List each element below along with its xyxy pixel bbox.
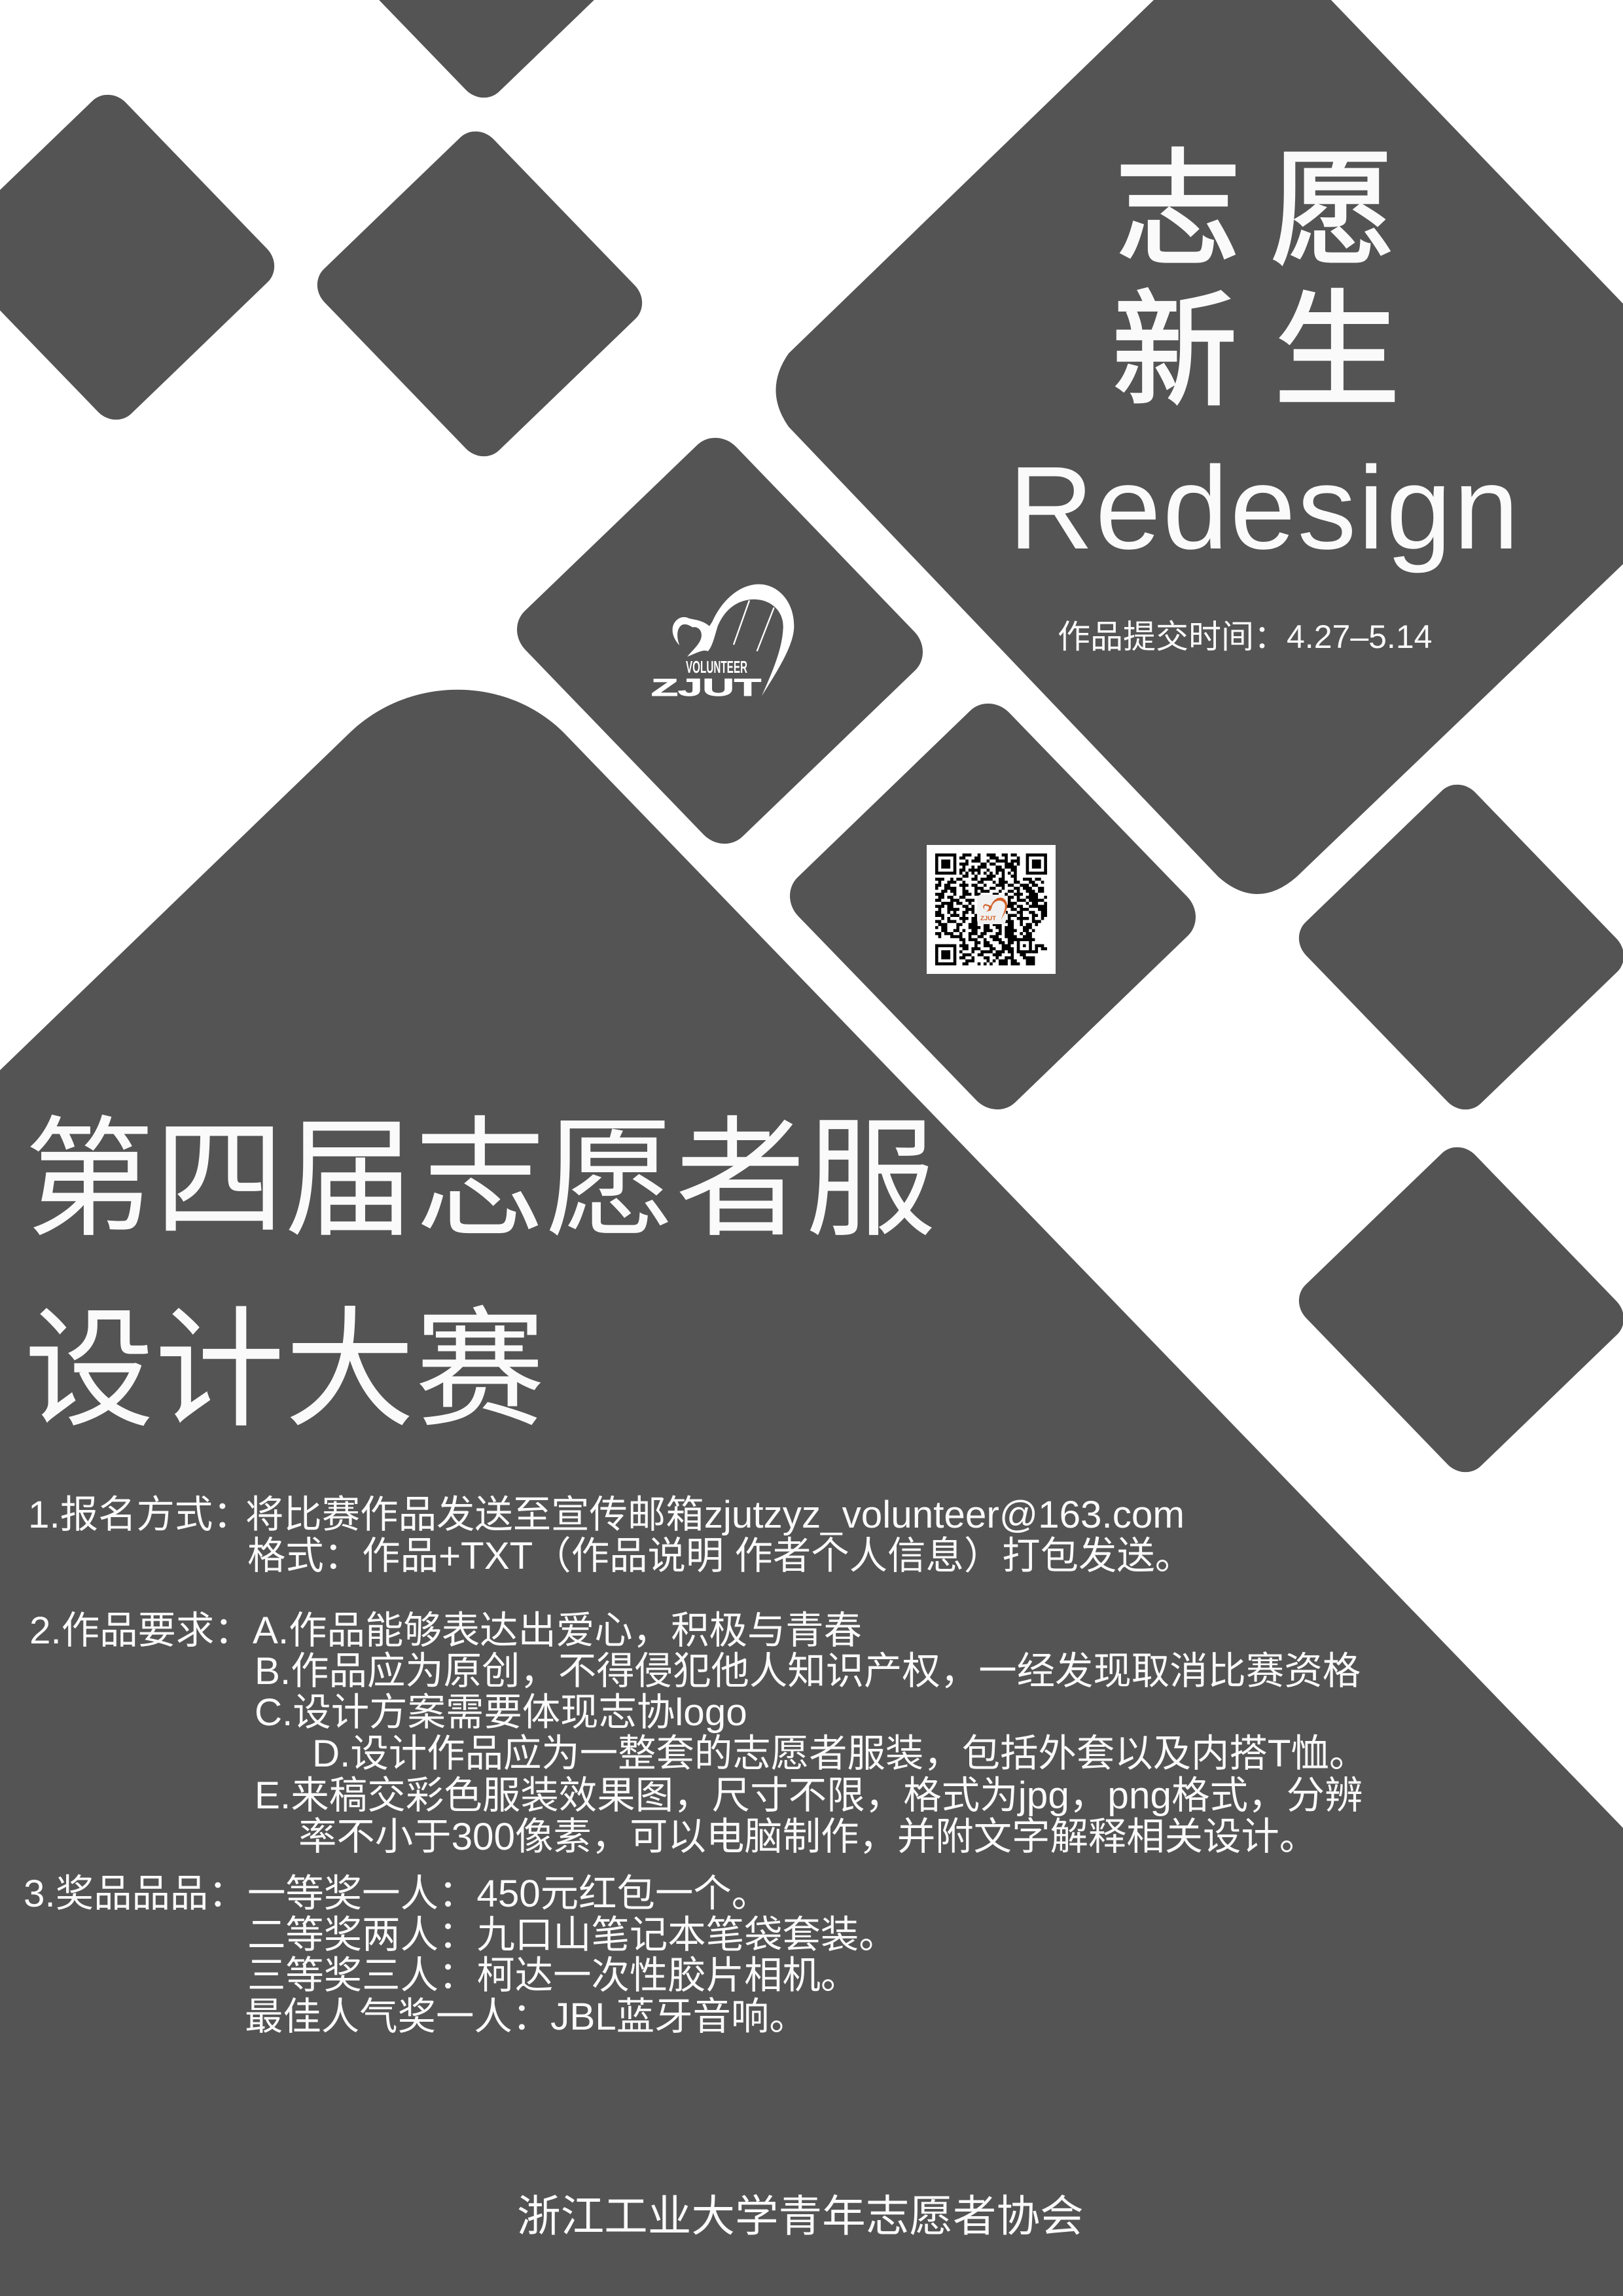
section 2: requirements — [29, 1609, 1367, 1858]
title: 第四届志愿者服 — [24, 1107, 936, 1253]
submission date: 作品提交时间：4.27–5.14 — [1058, 619, 1432, 655]
section 3: prizes: 一等奖一人：450元红包一个。 — [247, 1873, 770, 1915]
footer organiser: 浙江工业大学青年志愿者协会 — [517, 2193, 1084, 2241]
diamond: right upper — [1289, 775, 1623, 1119]
section 2: requirements: B.作品应为原创，不得侵犯他人知识产权，一经发现取消比赛资格 — [255, 1650, 1361, 1693]
title — [24, 1107, 936, 1443]
heading: 志愿新生: 生 — [1274, 281, 1400, 422]
QR centre logo — [977, 895, 1007, 924]
title: 设计大赛 — [24, 1298, 545, 1443]
logo word: volunteer: VOLUNTEER — [686, 657, 747, 677]
panel: logo diamond — [506, 427, 934, 855]
heading: 志愿新生: 新 — [1112, 281, 1238, 422]
panel: QR diamond — [779, 692, 1207, 1121]
logo harp and heart — [673, 584, 794, 696]
section 2: requirements: C.设计方案需要体现志协logo — [255, 1691, 747, 1734]
diamond shape — [779, 692, 1207, 1121]
section 3: prizes: 三等奖三人：柯达一次性胶片相机。 — [247, 1954, 859, 1997]
diamond: upper left — [0, 85, 284, 429]
panel shape — [776, 0, 1623, 894]
QR modules — [935, 853, 1047, 965]
diamond: top clipped — [308, 0, 652, 107]
logo word: zjut: ZJUT — [651, 674, 762, 701]
heading: 志愿新生: 志 — [1115, 139, 1241, 280]
section 3: prizes — [24, 1873, 897, 2038]
heading: 志愿新生 — [1112, 139, 1400, 422]
panel: top right — [776, 0, 1623, 894]
QR code — [927, 845, 1056, 974]
icon: ZJUT volunteer logo — [651, 584, 794, 701]
section 1: how to enter: 1.报名方式： — [28, 1494, 251, 1536]
section 2: requirements: 率不小于300像素，可以电脑制作，并附文字解释相关设计。 — [298, 1816, 1317, 1858]
section 1: how to enter: 将比赛作品发送至宣传邮箱zjutzyz_volunteer@163.com — [245, 1494, 1185, 1536]
QR centre logo: ZJUT — [980, 915, 997, 922]
heading: 志愿新生: 愿 — [1270, 139, 1396, 280]
section 3: prizes: 3.奖品品品： — [24, 1873, 247, 1915]
panel shape — [0, 690, 1623, 2296]
section 2: requirements: 2.作品要求： — [29, 1609, 253, 1652]
section 1: how to enter: 格式：作品+TXT（作品说明 作者个人信息）打包发送。 — [247, 1535, 1193, 1577]
section 2: requirements: A.作品能够表达出爱心，积极与青春 — [253, 1609, 862, 1652]
panel: main information — [0, 690, 1623, 2296]
section 2: requirements: D.设计作品应为一整套的志愿者服装，包括外套以及内搭T恤。 — [312, 1732, 1367, 1775]
section 3: prizes: 二等奖两人：九口山笔记本笔袋套装。 — [247, 1914, 897, 1956]
section 1: how to enter — [28, 1494, 1193, 1577]
section 3: prizes: 最佳人气奖一人：JBL蓝牙音响。 — [245, 1996, 808, 2038]
heading: Redesign: Redesign — [1008, 442, 1519, 574]
diamond: right lower — [1289, 1138, 1623, 1482]
section 2: requirements: E.来稿交彩色服装效果图，尺寸不限，格式为jpg，png格式，分辨 — [255, 1774, 1363, 1817]
diamond: upper middle — [308, 122, 652, 466]
QR background — [927, 845, 1056, 974]
diamond shape — [506, 427, 934, 855]
